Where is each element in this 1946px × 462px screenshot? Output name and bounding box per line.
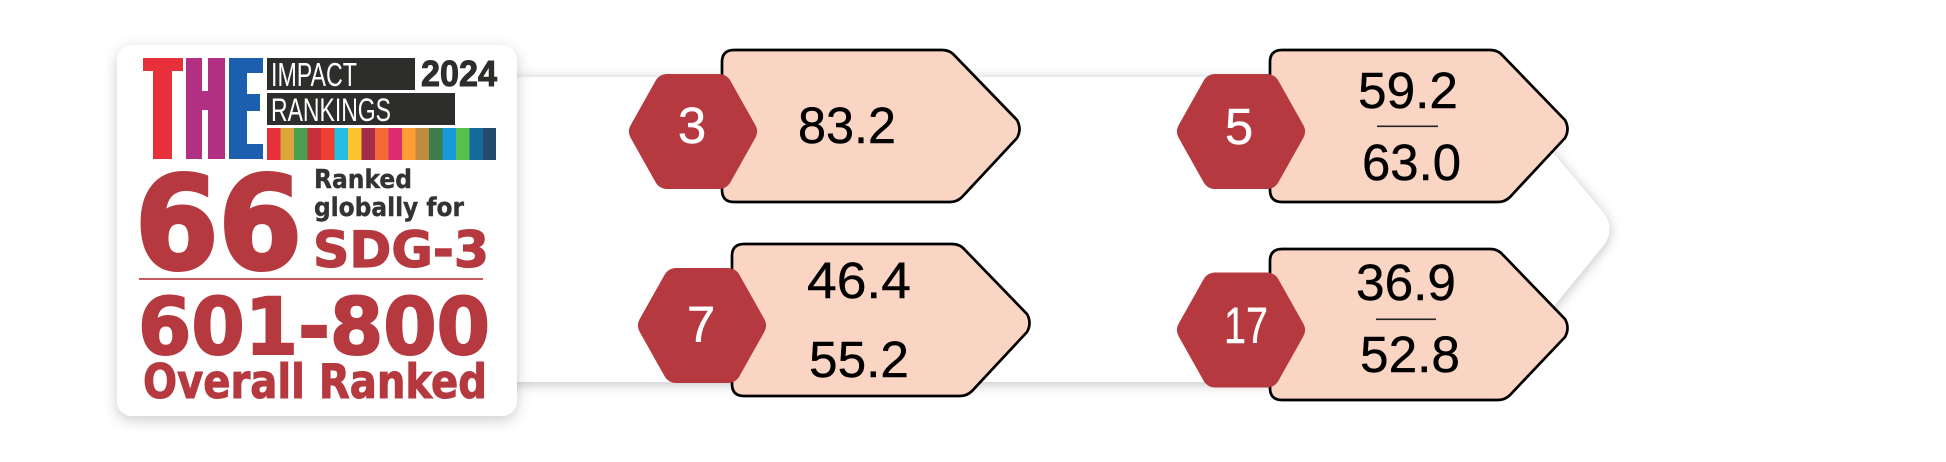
value top: 46.4 [807, 252, 911, 309]
panel: ranking card [117, 45, 517, 416]
hexagon badge [1190, 87, 1292, 176]
item: SDG 7 [651, 244, 1030, 396]
text: globally for: globally for [314, 193, 464, 223]
value box [732, 244, 1030, 396]
badge number: 7 [687, 296, 715, 353]
badge number: 5 [1225, 98, 1253, 155]
value top: 59.2 [1358, 62, 1458, 119]
badge number: 17 [1224, 297, 1268, 354]
value bottom: 63.0 [1362, 134, 1461, 191]
hexagon badge [642, 87, 744, 176]
hexagon badge [651, 281, 753, 370]
item: SDG 3 [642, 50, 1020, 202]
value box [1270, 249, 1568, 400]
SDG rank number: 66 [135, 150, 302, 299]
logo: year: 2024 [421, 53, 497, 94]
item: SDG 5 [1190, 50, 1568, 202]
hexagon badge [1190, 286, 1292, 374]
logo: IMPACT bar: IMPACT [271, 56, 357, 93]
value top: 36.9 [1356, 254, 1456, 311]
value: 83.2 [798, 97, 896, 154]
background connector band [500, 77, 1610, 382]
badge number: 3 [678, 97, 706, 154]
overall rank number: 601-800 [138, 283, 490, 373]
divider [139, 278, 483, 280]
value bottom: 52.8 [1360, 326, 1460, 383]
value box [722, 50, 1020, 202]
logo: RANKINGS bar: RANKINGS [271, 92, 391, 128]
logo: SDG colour strip [267, 128, 496, 160]
text: Ranked: Ranked [314, 165, 412, 195]
item: SDG 17 [1190, 249, 1568, 400]
text: SDG-3: SDG-3 [313, 221, 489, 279]
text: Overall Ranked: Overall Ranked [143, 355, 487, 410]
value bottom: 55.2 [809, 331, 909, 388]
value box [1270, 50, 1568, 202]
logo: THE letters [143, 58, 263, 159]
